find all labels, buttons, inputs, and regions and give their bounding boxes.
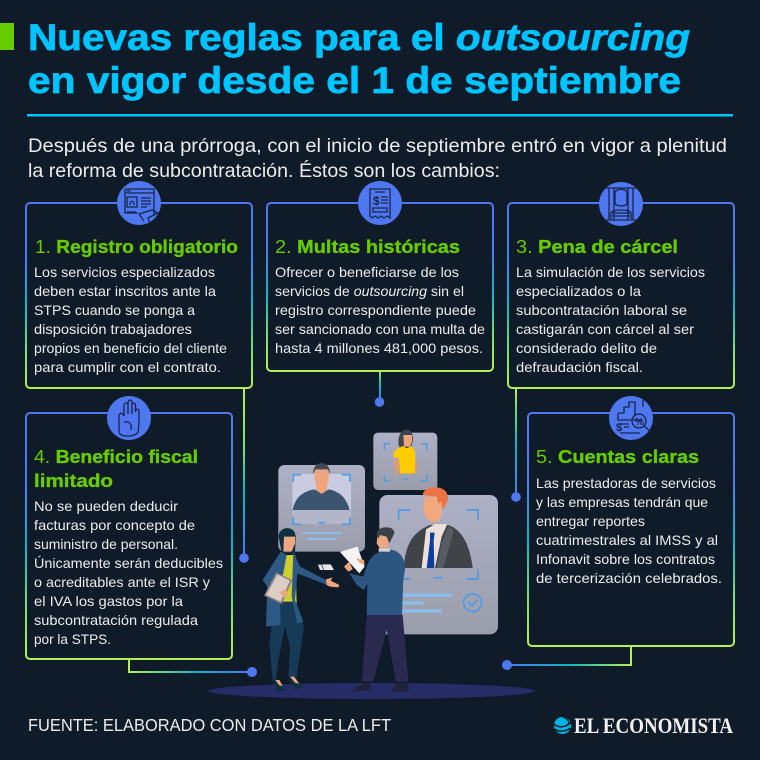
- connector: card 2 to illustration: [375, 371, 384, 407]
- body text: ser sancionado con una multa de: [275, 322, 485, 337]
- intro text: [28, 135, 727, 182]
- body text: especializados o la: [516, 284, 641, 299]
- icon: chart and magnifier: [609, 396, 653, 440]
- profile card: man: [278, 463, 365, 552]
- body text: [34, 265, 227, 375]
- body text: hasta 4 millones 481,000 pesos.: [275, 341, 483, 356]
- title: Nuevas reglas para el outsourcing: [28, 17, 690, 58]
- panel: pena de carcel: [508, 182, 734, 388]
- body text: Los servicios especializados: [34, 265, 215, 280]
- heading: 1. Registro obligatorio: [35, 236, 238, 257]
- body text: entregar reportes: [536, 514, 645, 529]
- connector: card 4 to illustration: [129, 659, 257, 677]
- icon: chart and magnifier: %: [635, 417, 644, 428]
- illustration: people reviewing profiles: [208, 429, 535, 699]
- intro text: Después de una prórroga, con el inicio de septiembre entró en vigor a plenitud: [28, 135, 727, 157]
- connector: card 1 to illustration: [239, 388, 249, 563]
- heading: [34, 446, 198, 491]
- profile card: executive: [379, 487, 498, 634]
- man with clipboard: [340, 527, 408, 692]
- body text: defraudación fiscal.: [516, 360, 643, 375]
- body text: Únicamente serán deducibles: [34, 555, 223, 571]
- icon: registration form: [117, 181, 161, 225]
- icon: prisoner behind bars: [599, 182, 643, 226]
- body text: [536, 476, 722, 586]
- body text: registro correspondiente puede: [275, 303, 476, 318]
- accent square: [0, 23, 14, 50]
- body text: servicios de outsourcing sin el: [275, 284, 464, 299]
- heading: limitado: [34, 470, 113, 491]
- body text: suministro de personal.: [34, 537, 178, 552]
- body text: [516, 265, 705, 375]
- icon: receipt: $: [373, 194, 380, 208]
- title rule: [27, 114, 733, 116]
- body text: disposición trabajadores: [34, 322, 192, 337]
- body text: facturas por concepto de: [34, 518, 195, 533]
- heading: 5. Cuentas claras: [536, 446, 699, 467]
- icon: raised hand: [107, 396, 151, 440]
- logo: El Economista: EL ECONOMISTA: [574, 713, 733, 738]
- panel: beneficio fiscal limitado: [26, 396, 232, 659]
- body text: La simulación de los servicios: [516, 265, 705, 280]
- connector: card 3 to illustration: [511, 388, 521, 502]
- connector: card 5 to illustration: [502, 646, 631, 670]
- body text: Las prestadoras de servicios: [536, 476, 716, 491]
- body text: el IVA los gastos por la: [34, 594, 183, 609]
- intro text: la reforma de subcontratación. Éstos son los cambios:: [28, 159, 500, 182]
- heading: 2. Multas históricas: [275, 236, 460, 257]
- body text: subcontratación regulada: [34, 613, 198, 628]
- body text: STPS cuando se ponga a: [34, 303, 195, 318]
- body text: considerado delito de: [516, 341, 657, 356]
- woman with folder: [263, 528, 339, 692]
- heading: 3. Pena de cárcel: [516, 236, 678, 257]
- body text: o acreditables ante el ISR y: [34, 575, 210, 590]
- body text: [34, 499, 223, 647]
- icon: receipt: [358, 181, 402, 225]
- title: [28, 17, 690, 101]
- body text: por la STPS.: [34, 632, 111, 647]
- body text: para cumplir con el contrato.: [34, 360, 221, 375]
- body text: subcontratación laboral se: [516, 303, 687, 318]
- panel: cuentas claras: [528, 396, 734, 646]
- body text: Infonavit sobre los contratos: [536, 552, 715, 567]
- ground ellipse: [208, 683, 535, 699]
- body text: Ofrecer o beneficiarse de los: [275, 265, 459, 280]
- body text: castigarán con cárcel al ser: [516, 322, 694, 337]
- panel: multas historicas: [267, 181, 493, 371]
- title: en vigor desde el 1 de septiembre: [28, 60, 681, 101]
- icon: chart and magnifier: $: [616, 422, 622, 434]
- source note: FUENTE: ELABORADO CON DATOS DE LA LFT: [28, 715, 391, 735]
- panel: registro obligatorio: [26, 181, 252, 388]
- profile card: woman: [373, 429, 437, 490]
- body text: deben estar inscritos ante la: [34, 284, 216, 299]
- body text: propios en beneficio del cliente: [34, 341, 227, 356]
- body text: y las empresas tendrán que: [536, 495, 708, 510]
- body text: No se pueden deducir: [34, 499, 178, 514]
- body text: cuatrimestrales al IMSS y al: [536, 533, 718, 548]
- heading: 4. Beneficio fiscal: [34, 446, 198, 467]
- small card on table: [318, 564, 334, 570]
- body text: [275, 265, 485, 356]
- body text: de tercerización celebrados.: [536, 571, 722, 586]
